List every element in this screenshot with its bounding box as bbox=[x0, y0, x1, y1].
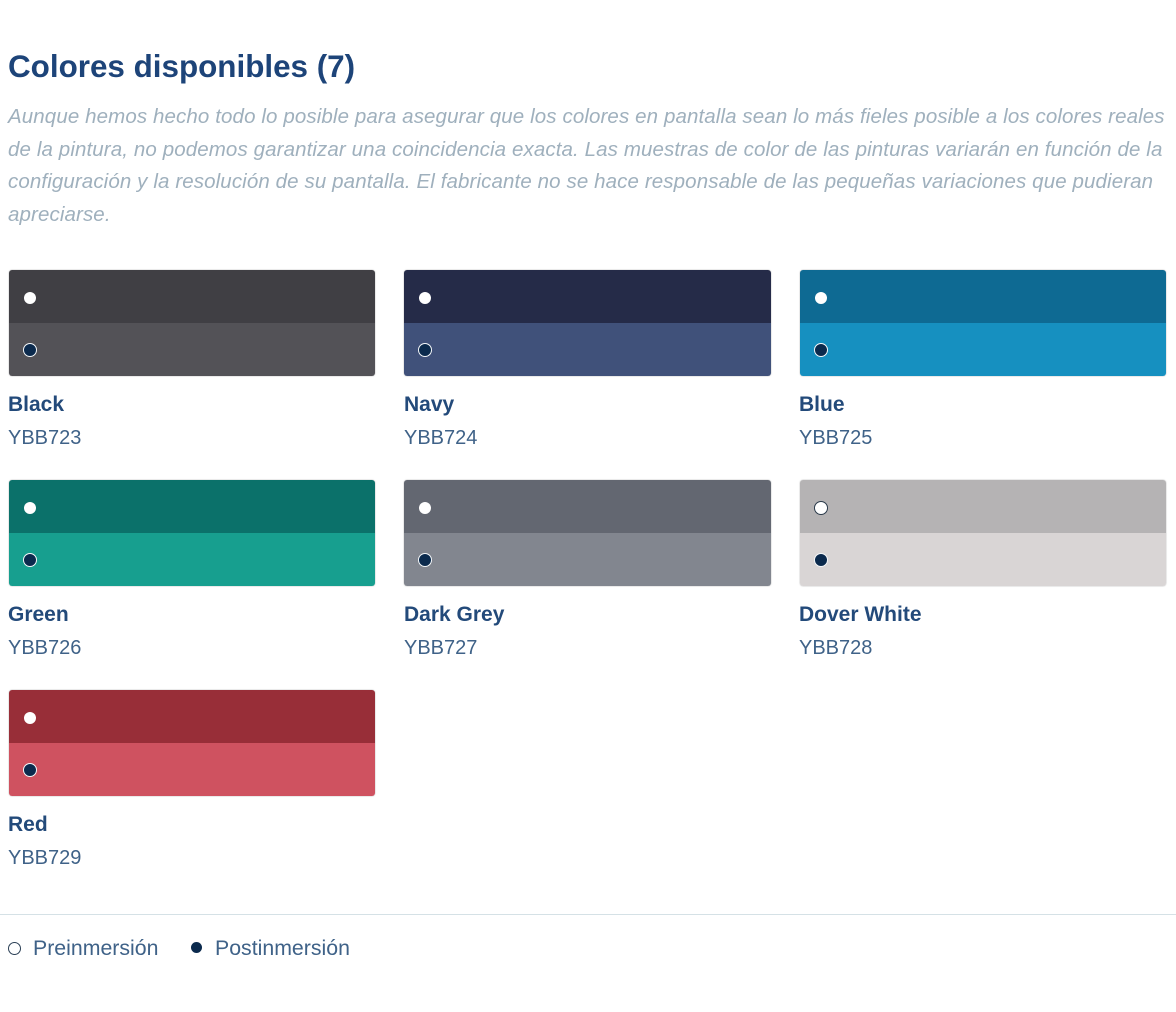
color card: Black: YBB723 bbox=[8, 426, 81, 448]
legend label: pre-immersion: Preinmersión bbox=[33, 936, 158, 960]
color card: Black: Black bbox=[8, 393, 64, 416]
legend icon: post-immersion bbox=[191, 942, 202, 953]
color card: Blue: Blue bbox=[799, 393, 845, 416]
color card: Dark Grey: YBB727 bbox=[404, 636, 477, 658]
color card: Dover White: Dover White bbox=[799, 603, 922, 626]
description text: Aunque hemos hecho todo lo posible para asegurar que los colores en pantalla sean lo más fieles posible a los colores reales bbox=[8, 105, 1165, 128]
color card: Navy: Navy bbox=[404, 393, 454, 416]
color card: Navy: YBB724 bbox=[404, 426, 477, 448]
color card: Dark Grey bbox=[403, 479, 772, 658]
description text: apreciarse. bbox=[8, 202, 111, 226]
color card: Dark Grey: Dark Grey bbox=[404, 603, 504, 626]
color card: Blue: YBB725 bbox=[799, 426, 872, 448]
legend icon: pre-immersion bbox=[8, 942, 21, 955]
description text: de la pintura, no podemos garantizar una coincidencia exacta. Las muestras de color de las pinturas variarán en función de la bbox=[8, 138, 1162, 160]
legend bbox=[8, 936, 350, 960]
color card: Dover White: YBB728 bbox=[799, 636, 872, 658]
title: Colores disponibles (7) bbox=[8, 49, 355, 84]
description text bbox=[7, 105, 1165, 226]
color card: Red bbox=[8, 689, 376, 868]
color card: Blue bbox=[799, 269, 1167, 448]
color card: Green bbox=[8, 479, 376, 658]
description text: configuración y la resolución de su pantalla. El fabricante no se hace responsable de las pequeñas variaciones que pudieran bbox=[8, 170, 1153, 193]
color card: Red: Red bbox=[8, 813, 48, 836]
color card: Red: YBB729 bbox=[8, 846, 81, 868]
color card: Dover White bbox=[799, 479, 1167, 658]
color card: Black bbox=[8, 269, 376, 448]
color card: Green: YBB726 bbox=[8, 636, 81, 658]
color card: Green: Green bbox=[8, 603, 69, 626]
legend label: post-immersion: Postinmersión bbox=[215, 936, 350, 960]
color card: Navy bbox=[403, 269, 772, 448]
